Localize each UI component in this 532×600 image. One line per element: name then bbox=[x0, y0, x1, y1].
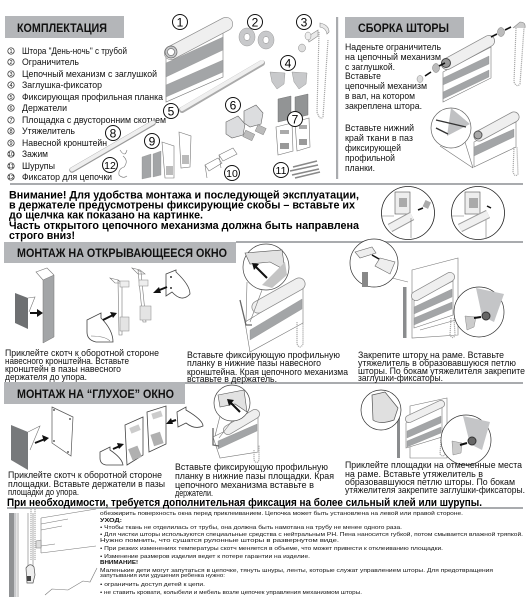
illustration: hanging bracket and holders bbox=[87, 268, 190, 342]
caption: open window step 2: вставьте в держатель. bbox=[187, 374, 277, 384]
warning text: строго вниз! bbox=[9, 230, 75, 242]
parts list: 5 bbox=[9, 95, 13, 101]
bold notice: При необходимости, требуется дополнительная фиксация на более сильный клей или шурупы. bbox=[7, 497, 482, 509]
care and safety text: Маленькие дети могут запутаться в цепочке, тянуть шнуры, ленты, которые служат управлением шторы. Для предотвращения bbox=[100, 568, 493, 574]
parts list: Шурупы bbox=[22, 161, 55, 171]
warning text: до щелчка как показано на картинке. bbox=[9, 210, 203, 222]
illustration: tape on hanging bracket bbox=[15, 268, 54, 343]
parts list: Фиксирующая профильная планка bbox=[22, 92, 163, 102]
illustration: fabric in profile slot bbox=[431, 108, 518, 176]
care and safety text: обезжирить поверхность окна перед приклеиванием. Цепочка может быть установлена на левой или правой стороне. bbox=[100, 510, 464, 517]
care and safety text: • Изменение размеров изделия ведет к потере гарантии на изделие. bbox=[100, 554, 311, 560]
caption: fixed window step 3 bbox=[345, 460, 525, 495]
parts list: Зажим bbox=[22, 149, 48, 159]
part 6: holders bbox=[226, 98, 266, 141]
heading: монтаж на открывающееся окно: МОНТАЖ НА ОТКРЫВАЮЩЕЕСЯ ОКНО bbox=[17, 248, 227, 260]
caption: fixed window step 1: площадки. Вставьте держатели в пазы bbox=[8, 479, 165, 489]
caption: open window step 1: Приклейте скотч к оборотной стороне bbox=[5, 348, 159, 358]
part 8: weight bar: 8 bbox=[110, 126, 117, 140]
assembly text 1: цепочный механизм bbox=[345, 81, 427, 91]
warning text: Часть открытого цепочного механизма должна быть направлена bbox=[9, 220, 360, 232]
heading: монтаж на открывающееся окно bbox=[4, 242, 236, 263]
caption: fixed window step 3: Приклейте площадки на отмеченные места bbox=[345, 460, 522, 470]
caption: open window step 2 bbox=[187, 350, 348, 384]
part 3: chain mechanism with cap bbox=[296, 14, 329, 118]
assembly text 2 bbox=[345, 123, 414, 173]
warning text: Внимание! Для удобства монтажа и последующей эксплуатации, bbox=[9, 190, 359, 202]
warning text: в держателе предусмотрены фиксирующие скобы – вставьте их bbox=[9, 200, 355, 212]
illustration: blind on frame, fixed window bbox=[361, 390, 491, 465]
heading: комплектация: КОМПЛЕКТАЦИЯ bbox=[17, 23, 107, 35]
part 12: chain retainer: 12 bbox=[104, 160, 116, 172]
illustration: profile bar into pad bbox=[213, 385, 259, 462]
assembly text 2: профильной bbox=[345, 153, 395, 163]
caption: fixed window step 3: образовавшуюся петлю шторы. По бокам bbox=[345, 477, 515, 487]
care and safety text: • При резких изменениях температуры скотч меняется в объеме, что может привести к отклеиванию площадки. bbox=[100, 546, 444, 552]
parts list: Фиксатор для цепочки bbox=[22, 172, 112, 182]
part 1: day-night blind with tube bbox=[165, 14, 226, 102]
part 4: retainer caps bbox=[270, 56, 307, 89]
heading: монтаж на глухое окно bbox=[4, 382, 185, 404]
part 1: day-night blind with tube: 1 bbox=[177, 16, 184, 30]
care and safety text: • Чтобы ткань не отделилась от трубы, она должна быть намотана на трубу не менее одного раза. bbox=[100, 525, 403, 531]
caption: fixed window step 1 bbox=[8, 470, 165, 497]
part 10: clamps: 10 bbox=[226, 168, 238, 180]
caption: fixed window step 2: цепочного механизма вставьте в bbox=[175, 480, 314, 490]
illustration: chain retainer on window frame bbox=[9, 509, 97, 597]
caption: fixed window step 2: Вставьте фиксирующую профильную bbox=[175, 462, 328, 472]
caption: open window step 1: кронштейн в пазы навесного bbox=[5, 364, 121, 374]
parts list: 12 bbox=[8, 175, 14, 181]
heading: комплектация bbox=[5, 16, 124, 38]
caption: open window step 2: кронштейна. Края цепочного механизма bbox=[187, 367, 348, 377]
caption: fixed window step 2: планку в нижние пазы площадки. Края bbox=[175, 471, 334, 481]
part 5: profile bar bbox=[164, 62, 262, 118]
caption: fixed window step 3: на раме. Вставьте утяжелитель в bbox=[345, 469, 483, 479]
heading: монтаж на глухое окно: МОНТАЖ НА “ГЛУХОЕ” ОКНО bbox=[17, 389, 174, 401]
parts list: 8 bbox=[9, 129, 13, 135]
part 9: hanging brackets bbox=[142, 132, 191, 179]
part 7: adhesive pads: 7 bbox=[292, 112, 299, 126]
caption: open window step 2: планку в нижние пазы навесного bbox=[187, 358, 321, 368]
assembly text 1: Наденьте ограничитель bbox=[345, 42, 441, 52]
warning text bbox=[9, 190, 360, 242]
parts list: 3 bbox=[9, 72, 13, 78]
illustration: tape on pad bbox=[11, 407, 73, 470]
illustration: blind on frame with callouts bbox=[350, 239, 504, 338]
parts list: Штора "День-ночь" с трубой bbox=[22, 46, 127, 56]
assembly text 2: Вставьте нижний bbox=[345, 123, 414, 133]
caption: fixed window step 1: Приклейте скотч к оборотной стороне bbox=[8, 470, 162, 480]
callout circle: bracket clip after bbox=[452, 186, 504, 240]
assembly text 2: планки. bbox=[345, 163, 375, 173]
parts list: 11 bbox=[8, 164, 14, 170]
illustration: pads and holders bbox=[100, 406, 203, 465]
parts list: 4 bbox=[9, 83, 13, 89]
part 11: screws bbox=[274, 161, 320, 178]
care and safety text: • не ставить кровати, колыбели и мебель возле цепочек управления механизмом шторы. bbox=[100, 590, 362, 596]
care and safety text: запутывания или удушения ребенка нужно: bbox=[100, 573, 225, 579]
parts list: 1 bbox=[9, 49, 13, 55]
assembly text 1: с заглушкой. bbox=[345, 62, 395, 72]
parts list: 7 bbox=[9, 118, 13, 124]
care and safety text: • ограничить доступ детей к цепи. bbox=[100, 581, 206, 588]
parts list: 10 bbox=[8, 152, 14, 158]
parts list: Заглушка-фиксатор bbox=[22, 80, 102, 90]
caption: open window step 3: утяжелитель в образовавшуюся петлю bbox=[358, 358, 516, 368]
care and safety text: ВНИМАНИЕ! bbox=[100, 560, 138, 566]
part 10: clamps bbox=[205, 148, 240, 180]
parts list: 9 bbox=[9, 141, 13, 147]
heading: сборка шторы bbox=[345, 17, 464, 38]
caption: open window step 3: шторы. По бокам утяжелителя закрепите bbox=[358, 366, 525, 376]
caption: open window step 2: Вставьте фиксирующую профильную bbox=[187, 350, 340, 360]
parts list: Утяжелитель bbox=[22, 126, 75, 136]
caption: fixed window step 1: площадки до упора. bbox=[8, 487, 79, 497]
illustration: profile bar into bracket bbox=[240, 244, 303, 352]
part 4: retainer caps: 4 bbox=[285, 56, 292, 70]
care and safety text bbox=[100, 510, 524, 596]
callout circle: bracket clip before bbox=[382, 186, 434, 240]
caption: fixed window step 2 bbox=[175, 462, 334, 498]
part 6: holders: 6 bbox=[230, 98, 237, 112]
caption: open window step 1 bbox=[5, 348, 159, 382]
parts list: 6 bbox=[9, 106, 13, 112]
assembly text 2: край ткани в паз bbox=[345, 133, 413, 143]
parts list: 2 bbox=[9, 60, 13, 66]
part 7: adhesive pads bbox=[276, 94, 310, 155]
caption: open window step 3: заглушки-фиксаторы. bbox=[358, 373, 443, 383]
part 2: limiter washers bbox=[239, 14, 274, 49]
caption: fixed window step 2: держатели. bbox=[175, 488, 213, 498]
part 12: chain retainer bbox=[102, 150, 127, 177]
parts list: Цепочный механизм с заглушкой bbox=[22, 69, 157, 79]
part 11: screws: 11 bbox=[276, 165, 287, 177]
assembly text 1: на цепочный механизм bbox=[345, 52, 441, 62]
assembly text 1 bbox=[345, 42, 441, 111]
part 5: profile bar: 5 bbox=[168, 104, 175, 118]
care and safety text: УХОД: bbox=[100, 518, 122, 524]
part 3: chain mechanism with cap: 3 bbox=[301, 16, 308, 30]
parts list: Площадка с двусторонним скотчем bbox=[22, 115, 166, 125]
caption: fixed window step 3: утяжелителя закрепите заглушки-фиксаторы. bbox=[345, 485, 525, 495]
assembly text 1: закреплена штора. bbox=[345, 101, 422, 111]
part 2: limiter washers: 2 bbox=[252, 16, 259, 30]
assembly text 1: в вал, на котором bbox=[345, 91, 415, 101]
parts list: Навесной кронштейн bbox=[22, 138, 107, 148]
illustration: assembling tube and chain bbox=[417, 22, 525, 102]
part 9: hanging brackets: 9 bbox=[149, 134, 156, 148]
parts list bbox=[8, 46, 166, 182]
heading: сборка шторы: СБОРКА ШТОРЫ bbox=[358, 23, 449, 35]
assembly text 2: фиксирующей bbox=[345, 143, 401, 153]
part 8: weight bar bbox=[72, 122, 153, 170]
caption: open window step 3: Закрепите штору на раме. Вставьте bbox=[358, 350, 504, 360]
caption: open window step 1: навесного кронштейна. Вставьте bbox=[5, 356, 129, 366]
assembly text 1: Вставьте bbox=[345, 71, 381, 81]
parts list: Ограничитель bbox=[22, 57, 79, 67]
caption: open window step 1: держателя до упора. bbox=[5, 372, 87, 382]
care and safety text: Нужно помнить, что сушатся рулонные шторы в развернутом виде. bbox=[100, 538, 340, 544]
care and safety text: • Для чистки шторы используются специальные средства с нейтральным РН. Пена наносится губкой, потом смывается влажной тряпкой. bbox=[100, 531, 524, 538]
caption: open window step 3 bbox=[358, 350, 525, 383]
parts list: Держатели bbox=[22, 103, 67, 113]
